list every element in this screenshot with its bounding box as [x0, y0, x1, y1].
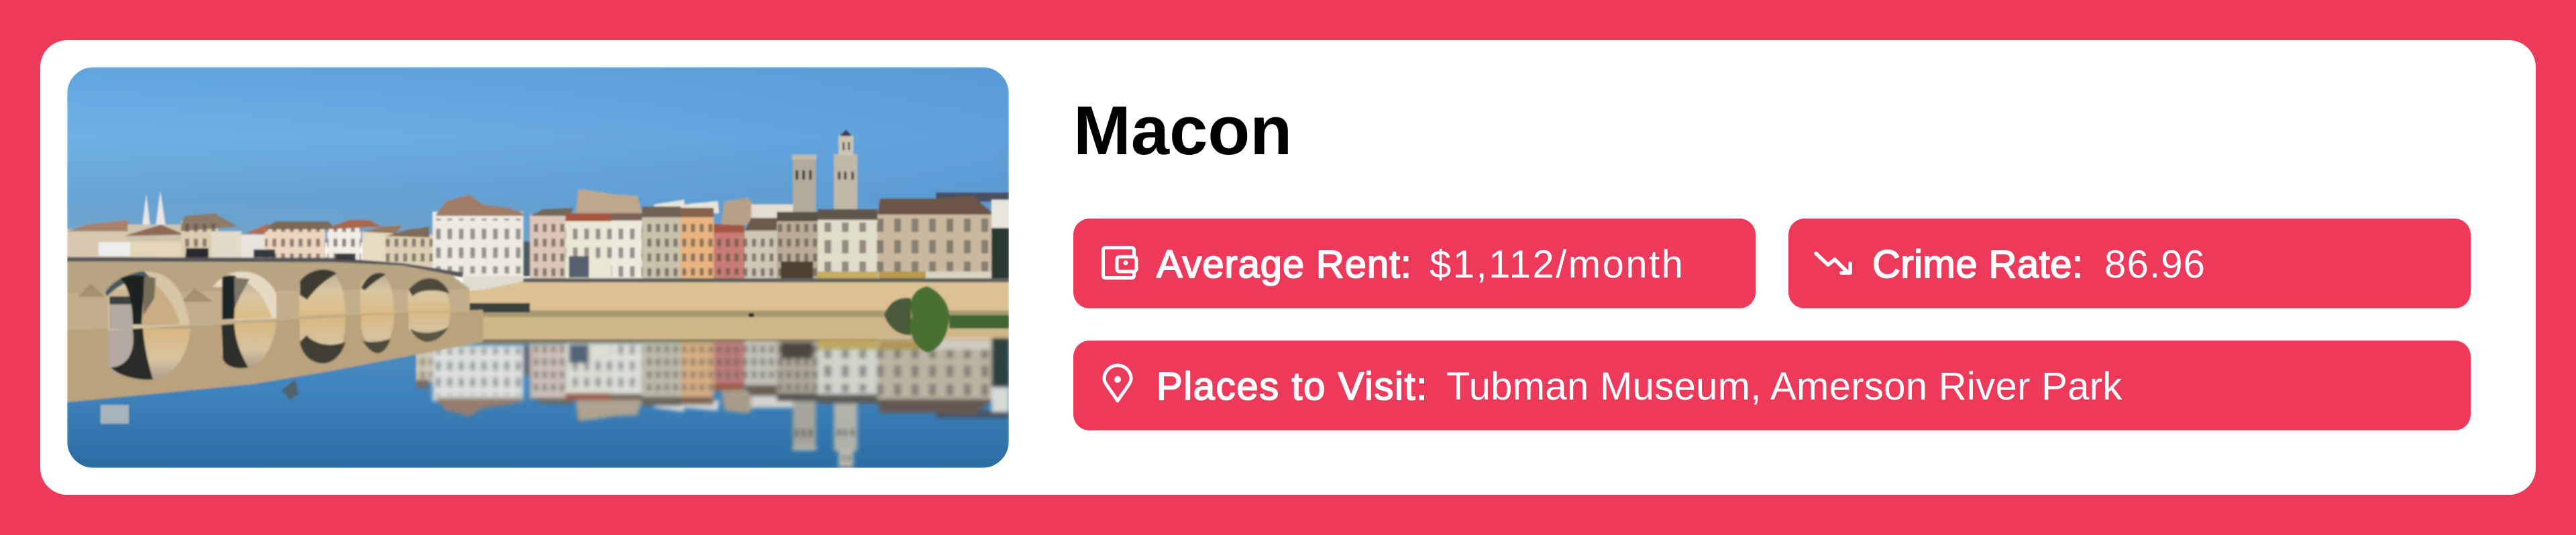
stat: places to visit — [1073, 341, 2471, 430]
value: rent: $1,112/month — [1430, 243, 1684, 286]
label: average rent: Average Rent: — [1157, 243, 1412, 286]
label: places to visit: Places to Visit: — [1157, 365, 1428, 408]
value: places: Tubman Museum, Amerson River Park — [1446, 365, 2123, 408]
arches — [105, 270, 450, 331]
stat: crime rate — [1788, 219, 2471, 308]
icon: wallet — [1103, 248, 1136, 278]
stone bridge — [67, 276, 471, 331]
photo: bridge and riverside town — [67, 67, 1009, 473]
title: Macon — [1073, 92, 1292, 169]
quay wall — [468, 280, 1009, 312]
label: crime rate: Crime Rate: — [1872, 243, 2083, 286]
icon: map pin — [1104, 365, 1131, 401]
bridge reflection — [67, 310, 483, 402]
icon: trending down — [1816, 253, 1850, 273]
tree on the quay — [884, 298, 911, 335]
quay and town reflection — [463, 317, 1009, 344]
street traffic — [67, 259, 463, 275]
value: crime rate: 86.96 — [2104, 243, 2206, 286]
stat: average rent — [1073, 219, 1756, 308]
